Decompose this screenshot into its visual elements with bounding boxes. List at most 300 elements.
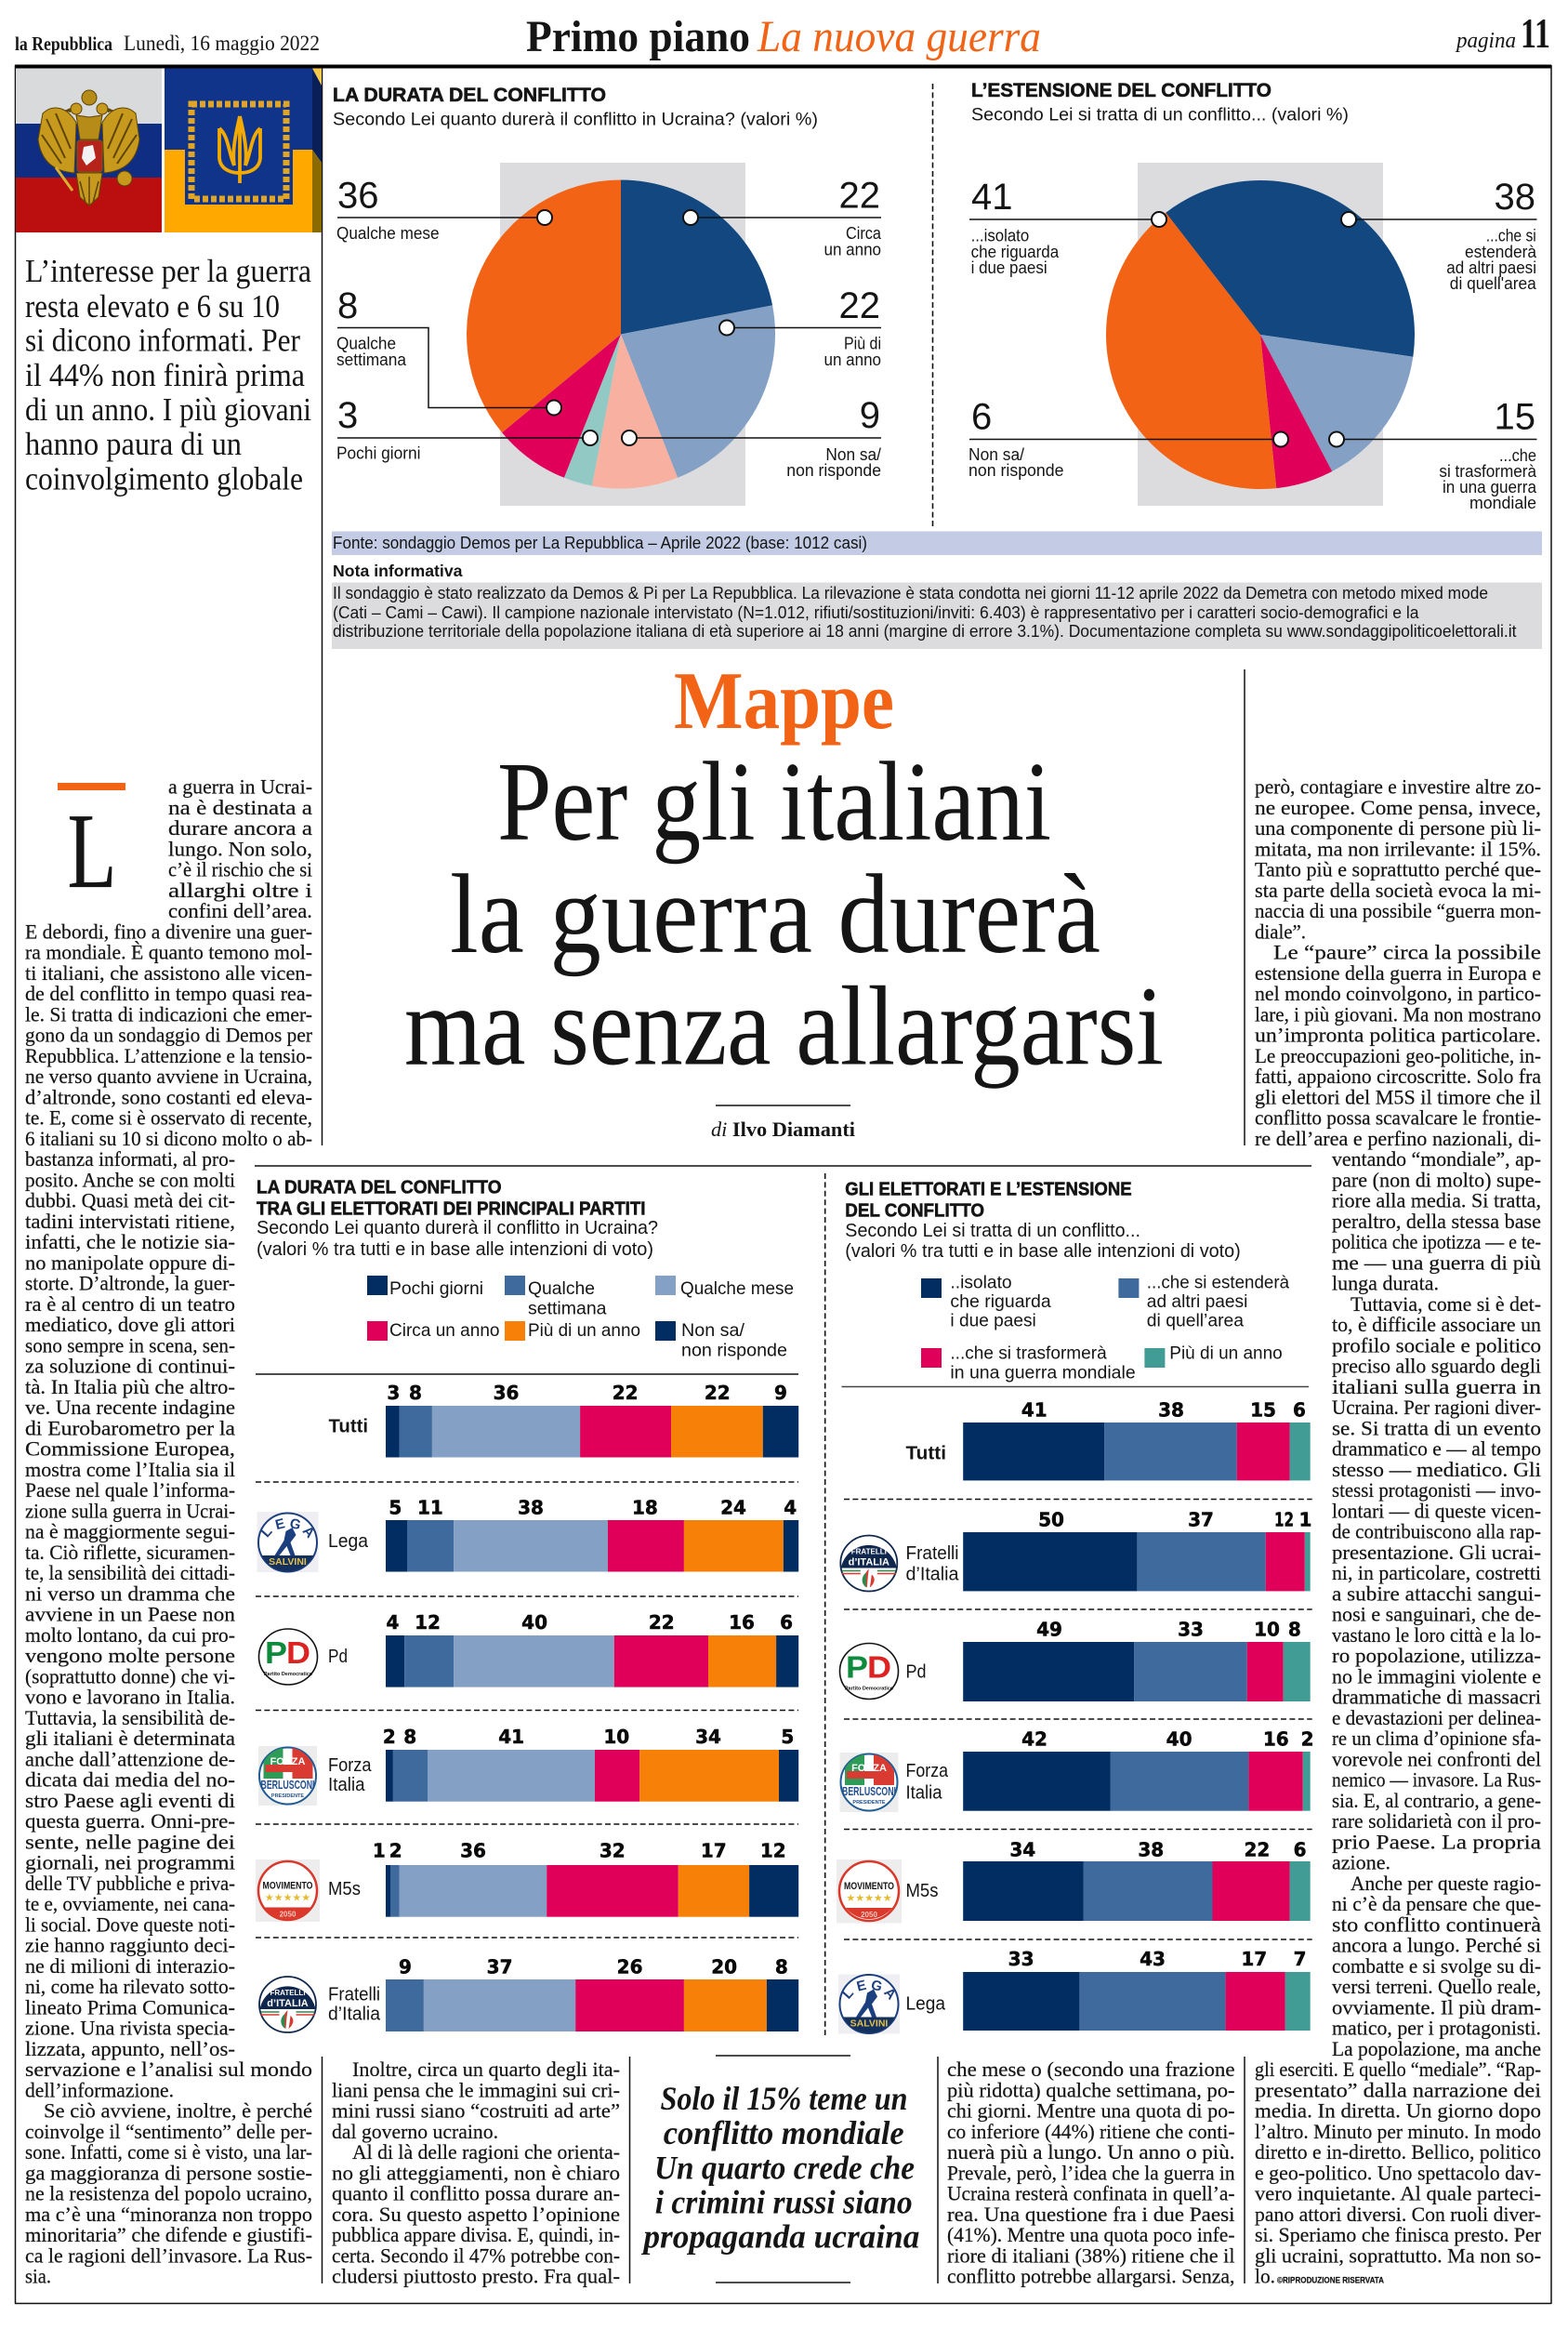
- legend: Più di un anno: [1169, 1343, 1283, 1363]
- article: right column: gli eserciti. E quello “mediale”. “Rap-: [1255, 2058, 1541, 2081]
- pull quote: Solo il 15% teme un: [660, 2080, 907, 2117]
- row: Fratelli d'Italia: 26: [617, 1956, 643, 1978]
- logo: Forza Italia: [840, 1753, 898, 1812]
- callout: circa un anno 22: 22: [838, 175, 880, 216]
- body text: sone. Infatti, come si è visto, una lar-: [25, 2140, 312, 2164]
- chart subheading: Secondo Lei si tratta di un conflitto... (valori %): [971, 104, 1349, 125]
- callout: circa un anno 22: Circa: [846, 224, 882, 243]
- logo: Pd: [258, 1629, 318, 1685]
- body text: ni verso un dramma che: [25, 1581, 235, 1605]
- row: Forza Italia: [840, 1727, 1314, 1812]
- article: right column: se. Si tratta di un evento: [1332, 1416, 1541, 1439]
- newspaper name: la Repubblica: [15, 33, 112, 55]
- body text: na è maggiormente segui-: [25, 1519, 235, 1543]
- article: right column: Anche per queste ragio-: [1351, 1872, 1541, 1895]
- row: M5s: [256, 1839, 798, 1922]
- body text: minoritaria” che difende e giustifi-: [25, 2223, 312, 2246]
- logo: Lega: [838, 1975, 900, 2034]
- article: right column: no le immagini violente e: [1332, 1664, 1541, 1687]
- body text: ne verso quanto avviene in Ucraina,: [25, 1065, 312, 1088]
- article: right column: Tuttavia, come si è det-: [1351, 1292, 1541, 1316]
- callout: qualche settimana 8: Qualche: [336, 335, 396, 353]
- logo: Pd: D: [286, 1635, 310, 1670]
- body text: za soluzione di continui-: [25, 1354, 235, 1378]
- row: Fratelli d'Italia: 12: [1274, 1508, 1294, 1530]
- body text: sente, nelle pagine dei: [25, 1830, 235, 1853]
- row: Tutti: [329, 1382, 798, 1458]
- article: right column: re un clima d’opinione sfa-: [1332, 1727, 1541, 1750]
- callout: piu di un anno 22: [824, 285, 881, 369]
- article: right column: e geo-politico. Uno spettacolo dav-: [1255, 2161, 1541, 2184]
- row: Lega: 33: [1008, 1948, 1034, 1970]
- callout: circa un anno 22: un anno: [824, 240, 881, 258]
- deck text: hanno paura di un: [25, 426, 242, 462]
- panel: pie chart, durata del conflitto: [333, 84, 882, 506]
- page label: pagina: [1455, 29, 1516, 53]
- row: Forza Italia: 40: [1166, 1727, 1192, 1750]
- main headline: ma senza allargarsi: [404, 963, 1164, 1090]
- date: Lunedì, 16 maggio 2022: [124, 32, 320, 55]
- callout: si estendera 38: [1446, 177, 1537, 293]
- main headline: Per gli italiani: [497, 739, 1051, 865]
- row: Lega: Lega: [328, 1531, 369, 1552]
- article: left column: [25, 775, 313, 2287]
- article: right column: ni, in particolare, costretti: [1332, 1561, 1541, 1584]
- body text: di Eurobarometro per la: [25, 1416, 235, 1439]
- callout: circa un anno 22: [824, 175, 882, 258]
- callout: guerra mondiale 15: mondiale: [1469, 494, 1536, 512]
- article: right column: gli elettori del M5S il timore che il: [1255, 1085, 1541, 1108]
- article: right column: azione.: [1332, 1850, 1390, 1874]
- article: lower column A: [332, 2058, 620, 2287]
- callout: guerra mondiale 15: ...che: [1499, 446, 1536, 465]
- chart heading: GLI ELETTORATI E L’ESTENSIONE: [845, 1179, 1132, 1199]
- body text: E debordi, fino a divenire una guer-: [25, 920, 312, 943]
- body text: bastanza informati, al pro-: [25, 1147, 235, 1171]
- row: Forza Italia: 34: [695, 1726, 721, 1748]
- row: Forza Italia: 5: [781, 1726, 794, 1748]
- article: right column: però, contagiare e investire altre zo-: [1255, 775, 1541, 798]
- logo: Forza Italia: BERLUSCONI: [260, 1778, 314, 1792]
- row: Forza Italia: 41: [498, 1726, 524, 1748]
- row: Fratelli d'Italia: Fratelli: [905, 1543, 959, 1564]
- body text: no manipolate oppure di-: [25, 1251, 235, 1274]
- callout: qualche settimana 8: [336, 285, 407, 369]
- row: M5s: 36: [460, 1839, 486, 1861]
- callout: si estendera 38: ad altri paesi: [1446, 258, 1536, 277]
- chart heading: TRA GLI ELETTORATI DEI PRINCIPALI PARTITI: [257, 1198, 645, 1220]
- callout: isolato 41: ...isolato: [971, 226, 1029, 245]
- row: Forza Italia: Italia: [328, 1775, 365, 1795]
- logo: M5s: MOVIMENTO: [844, 1881, 894, 1892]
- callout: guerra mondiale 15: si trasformerà: [1439, 462, 1537, 481]
- logo: Lega: [257, 1512, 318, 1572]
- body text: le. Si tratta di indicazioni che emer-: [25, 1002, 312, 1026]
- logo: Fratelli d'Italia: FRATELLI: [851, 1547, 887, 1556]
- row: Pd: Pd: [905, 1662, 926, 1683]
- body text: te. E, come si è osservato di recente,: [25, 1106, 312, 1129]
- logo: M5s: ★★★★★: [265, 1893, 310, 1904]
- row: Fratelli d'Italia: [259, 1956, 798, 2032]
- article: lower column C: co inferiore (44%) ritiene che conti-: [947, 2120, 1234, 2143]
- article: right column: una componente di persone più li-: [1255, 816, 1541, 840]
- article: right column: ni c’è da pensare che que-: [1332, 1892, 1541, 1915]
- legend: Più di un anno: [528, 1320, 640, 1341]
- row: Pd: [840, 1618, 1311, 1701]
- body text: stro Paese agli eventi di: [25, 1789, 235, 1812]
- article: right column: e devastazioni per delinea-: [1332, 1706, 1541, 1729]
- chart subheading: Secondo Lei si tratta di un conflitto...: [845, 1221, 1140, 1241]
- body text: giornali, nei programmi: [25, 1850, 235, 1874]
- body text: a guerra in Ucrai-: [168, 775, 312, 798]
- logo: Pd: [840, 1644, 898, 1700]
- body text: li social. Dove queste noti-: [25, 1912, 235, 1936]
- article: lower column C: conflitto potrebbe allargarsi. Senza,: [947, 2265, 1234, 2287]
- row: Lega: 4: [784, 1497, 797, 1519]
- row: Forza Italia: 2: [383, 1726, 396, 1748]
- row: M5s: 32: [600, 1839, 626, 1861]
- body text: durare ancora a: [168, 816, 312, 840]
- legend: ...che si trasformerà: [950, 1343, 1107, 1363]
- row: M5s: 6: [1294, 1839, 1307, 1861]
- row: Forza Italia: 8: [403, 1726, 416, 1748]
- article: right column: naccia di una possibile “guerra mon-: [1255, 899, 1541, 922]
- article: right column: La popolazione, ma anche: [1332, 2037, 1541, 2060]
- row: Tutti: 15: [1250, 1398, 1276, 1421]
- article: right column: rare solidarietà con il pro-: [1332, 1809, 1541, 1833]
- article: lower column C: [947, 2058, 1234, 2287]
- logo: Lega: A: [880, 1985, 899, 2003]
- row: M5s: 1: [373, 1839, 386, 1861]
- article: right column: Ucraina. Per ragioni diver-: [1332, 1396, 1541, 1419]
- article: right column: l’altro. Minuto per minuto. In modo: [1255, 2120, 1541, 2143]
- article: lower column A: dal governo ucraino.: [332, 2120, 498, 2143]
- logo: Lega: E: [855, 1978, 868, 1995]
- chart heading: [845, 1179, 1132, 1222]
- article: right column: Le preoccupazioni geo-politiche, in-: [1255, 1044, 1541, 1067]
- article: right column: drammatiche di massacri: [1332, 1685, 1541, 1709]
- row: Tutti: [905, 1398, 1311, 1480]
- pull quote: i crimini russi siano: [655, 2184, 913, 2221]
- article: right column: sia. E, al contrario, a gene-: [1332, 1789, 1541, 1812]
- legend: [921, 1272, 1289, 1383]
- row: M5s: 12: [760, 1839, 786, 1861]
- callout: piu di un anno 22: un anno: [824, 351, 881, 369]
- logo: Lega: L: [258, 1524, 276, 1541]
- article: right column: versi terreni. Quello reale,: [1332, 1975, 1541, 1998]
- methodological note: Nota informativa: [333, 562, 463, 580]
- deck text: si dicono informati. Per: [25, 322, 300, 359]
- row: Lega: Lega: [905, 1993, 946, 2014]
- row: M5s: 34: [1009, 1839, 1035, 1861]
- article: right column: presentato” dalla narrazione dei: [1255, 2078, 1541, 2101]
- callout: non sa 6: Non sa/: [968, 445, 1024, 464]
- row: Pd: 12: [415, 1611, 441, 1634]
- article: right column: un’impronta politica particolare.: [1255, 1023, 1541, 1047]
- body text: sia.: [25, 2265, 51, 2287]
- source bar: [332, 532, 1542, 555]
- callout: guerra mondiale 15: in una guerra: [1443, 478, 1537, 496]
- article: lower column A: Al di là delle ragioni che orienta-: [352, 2140, 620, 2164]
- drop cap accent bar: [58, 783, 125, 790]
- logo: Pd: D: [867, 1649, 891, 1685]
- row: Forza Italia: Italia: [905, 1782, 942, 1803]
- article: right column: me — una guerra di più: [1332, 1251, 1541, 1274]
- article: right column: mitata, ma non irrilevante: il 15%.: [1255, 837, 1541, 860]
- row: Pd: 6: [780, 1611, 793, 1634]
- page header: [15, 10, 1550, 61]
- row: M5s: M5s: [328, 1879, 361, 1899]
- panel: bar chart, durata per partito: [256, 1177, 798, 2032]
- body text: lineato Prima Comunica-: [25, 1995, 235, 2018]
- row: Tutti: 41: [1021, 1398, 1048, 1421]
- article: right column: vorevole nei confronti del: [1332, 1747, 1541, 1770]
- body text: te, la sensibilità dei cittadi-: [25, 1561, 235, 1584]
- callout: qualche mese 36: 36: [337, 175, 379, 216]
- body text: ni, come ha rilevato sotto-: [25, 1975, 235, 1998]
- chart heading: DEL CONFLITTO: [845, 1199, 984, 1222]
- article: lower column A: cludersi piuttosto presto. Fra qual-: [332, 2265, 620, 2287]
- row: M5s: 2: [389, 1839, 402, 1861]
- logo: Fratelli d'Italia: d’ITALIA: [267, 1998, 309, 2009]
- pull quote: propaganda ucraina: [640, 2218, 919, 2256]
- row: Fratelli d'Italia: d’Italia: [328, 2005, 381, 2025]
- body text: infatti, che le notizie sia-: [25, 1230, 235, 1253]
- row: Lega: 7: [1294, 1948, 1307, 1970]
- body text: dell’informazione.: [25, 2078, 174, 2101]
- logo: M5s: 2050: [861, 1911, 877, 1919]
- body text: te e, ovviamente, nei cana-: [25, 1892, 235, 1915]
- row: Pd: 49: [1036, 1618, 1062, 1640]
- source bar: Fonte: sondaggio Demos per La Repubblica – Aprile 2022 (base: 1012 casi): [333, 534, 867, 552]
- body text: storte. D’altronde, la guer-: [25, 1272, 235, 1294]
- row: Pd: 4: [386, 1611, 399, 1634]
- logo: Pd: Partito Democratico: [264, 1672, 313, 1677]
- article: right column: riore alla media. Si tratta,: [1332, 1188, 1541, 1212]
- row: M5s: 38: [1138, 1839, 1164, 1861]
- body text: Se ciò avviene, inoltre, è perché: [44, 2099, 312, 2122]
- logo: Forza Italia: BERLUSCONI: [842, 1784, 896, 1798]
- article: right column: lare, i più giovani. Ma non mostrano: [1255, 1002, 1541, 1026]
- body text: ra mondiale. È quanto temono mol-: [25, 941, 312, 963]
- logo: Fratelli d'Italia: [840, 1536, 897, 1592]
- logo: Pd: Partito Democratico: [845, 1687, 894, 1692]
- callout: guerra mondiale 15: [1439, 396, 1537, 512]
- row: M5s: 17: [701, 1839, 727, 1861]
- callout: non sa 9: [786, 395, 881, 480]
- body text: ca le ragioni dell’invasore. La Rus-: [25, 2243, 312, 2267]
- callout: si estendera 38: ...che si: [1486, 226, 1536, 245]
- article: lower column C: rea. Una questione fra i due Paesi: [947, 2203, 1234, 2226]
- callout: pochi giorni 3: Pochi giorni: [336, 444, 420, 463]
- body text: Paese nel quale l’informa-: [25, 1478, 235, 1502]
- callout: non sa 6: [968, 396, 1063, 480]
- body text: tadini intervistati ritiene,: [25, 1210, 235, 1233]
- article: right column: sto conflitto continuerà: [1332, 1912, 1541, 1936]
- logo: Forza Italia: PRESIDENTE: [271, 1793, 304, 1799]
- body text: ve. Una recente indagine: [25, 1396, 235, 1419]
- legend: non risponde: [681, 1341, 787, 1361]
- body text: vengono molte persone: [25, 1644, 235, 1667]
- callout: qualche mese 36: Qualche mese: [336, 224, 439, 243]
- article: right column: ro popolazione, utilizza-: [1332, 1644, 1541, 1667]
- callout: qualche settimana 8: 8: [337, 285, 358, 326]
- row: Fratelli d'Italia: 20: [711, 1956, 737, 1978]
- body text: avviene in un Paese non: [25, 1603, 235, 1625]
- article: lower column C: chi giorni. Mentre una quota di po-: [947, 2099, 1234, 2122]
- legend: Non sa/: [681, 1320, 745, 1341]
- article: right column: matico, per i protagonisti.: [1332, 2016, 1541, 2040]
- row: Tutti: 9: [774, 1382, 787, 1404]
- article: right column: ventando “mondiale”, ap-: [1332, 1147, 1541, 1171]
- body text: ne di milioni di interazio-: [25, 1954, 235, 1978]
- row: Tutti: 6: [1293, 1398, 1306, 1421]
- article: right column: nosi e sanguinari, che de-: [1332, 1603, 1541, 1625]
- byline: di Ilvo Diamanti: [711, 1118, 855, 1141]
- article: right column: politica che ipotizza — e te-: [1332, 1230, 1541, 1253]
- body text: gono da un sondaggio di Demos per: [25, 1023, 313, 1047]
- pull quote: conflitto mondiale: [664, 2114, 904, 2151]
- body text: d’altronde, sono costanti ed eleva-: [25, 1085, 312, 1108]
- row: Lega: 5: [389, 1497, 402, 1519]
- row: Tutti: 22: [613, 1382, 639, 1404]
- article: right column: diretto e in-diretto. Bellico, politico: [1255, 2140, 1541, 2164]
- article: lower column A: mini russi siano “costruiti ad arte”: [332, 2099, 620, 2122]
- deck text: L’interesse per la guerra: [25, 253, 311, 289]
- chart subheading: (valori % tra tutti e in base alle intenzioni di voto): [845, 1241, 1241, 1262]
- chart heading: [257, 1177, 645, 1220]
- body text: 6 italiani su 10 si dicono molto o ab-: [25, 1127, 312, 1150]
- body text: mediatico, dove gli attori: [25, 1313, 235, 1336]
- legend: Qualche: [528, 1278, 595, 1299]
- body text: ra è al centro di un teatro: [25, 1292, 235, 1316]
- article: right column: preciso allo sguardo degli: [1332, 1354, 1541, 1378]
- chart heading: LA DURATA DEL CONFLITTO: [333, 84, 606, 106]
- article: right column: de contribuiscono alla rap-: [1332, 1519, 1541, 1543]
- article: right column: gli ucraini, soprattutto. Ma non so-: [1255, 2243, 1541, 2267]
- article: right column: stesso — mediatico. Gli: [1332, 1458, 1541, 1481]
- deck text: coinvolgimento globale: [25, 461, 303, 496]
- row: Pd: 22: [649, 1611, 675, 1634]
- callout: isolato 41: 41: [971, 177, 1013, 218]
- logo: M5s: MOVIMENTO: [262, 1880, 313, 1891]
- body text: ta. Ciò riflette, sicuramen-: [25, 1541, 235, 1564]
- row: Pd: 16: [729, 1611, 755, 1634]
- logo: M5s: [837, 1859, 902, 1923]
- article: lower column A: pubblica appare divisa. E, quindi, in-: [332, 2223, 620, 2246]
- kicker: Mappe: [674, 656, 894, 747]
- row: Tutti: 3: [387, 1382, 400, 1404]
- callout: isolato 41: i due paesi: [971, 258, 1048, 277]
- row: Fratelli d'Italia: [840, 1508, 1311, 1592]
- callout: si estendera 38: estenderà: [1465, 243, 1537, 261]
- callout: piu di un anno 22: Più di: [844, 335, 881, 353]
- body text: (soprattutto donne) che vi-: [25, 1664, 235, 1687]
- row: Lega: 17: [1241, 1948, 1267, 1970]
- row: Pd: 40: [521, 1611, 547, 1634]
- logo: Lega: A: [299, 1523, 318, 1542]
- copyright line: ©RIPRODUZIONE RISERVATA: [1277, 2276, 1384, 2285]
- body text: anche dall’attenzione de-: [25, 1747, 235, 1770]
- chart subheading: [257, 1218, 658, 1260]
- legend: i due paesi: [950, 1311, 1036, 1331]
- row: Lega: 24: [720, 1497, 746, 1519]
- chart heading: LA DURATA DEL CONFLITTO: [257, 1177, 502, 1198]
- logo: M5s: ★★★★★: [846, 1893, 892, 1904]
- chart subheading: [845, 1221, 1241, 1262]
- callout: pochi giorni 3: [336, 395, 420, 463]
- article: right column: sta parte della società evoca la mi-: [1255, 879, 1541, 902]
- pull quote: Un quarto crede che: [654, 2149, 915, 2186]
- legend: Qualche mese: [680, 1278, 794, 1299]
- row: M5s: 22: [1244, 1839, 1270, 1861]
- body text: ti italiani, che assistono alle vicen-: [25, 961, 312, 985]
- section title: Primo piano: [526, 12, 750, 61]
- article: right column: pare (non di molto) supe-: [1332, 1168, 1541, 1191]
- article: right column: re dell’area e perfino nazionali, di-: [1255, 1127, 1541, 1150]
- legend: Circa un anno: [389, 1320, 500, 1341]
- row: Lega: 38: [518, 1497, 544, 1519]
- logo: Fratelli d'Italia: d’ITALIA: [849, 1556, 889, 1568]
- article: right column: si. Speriamo che finisca presto. Per: [1255, 2223, 1542, 2246]
- methodological note: distribuzione territoriale della popolazione italiana di età superiore ai 18 anni (margine di errore 3.1%). Documentazione completa su www.sondaggipoliticoelettorali.it: [333, 622, 1517, 641]
- article: right column: ne europee. Come pensa, invece,: [1255, 796, 1541, 819]
- article: lower column A: liani pensa che le immagini sui cri-: [332, 2078, 620, 2101]
- panel: pie chart, estensione del conflitto: [968, 79, 1537, 512]
- article: right column: to, è difficile associare un: [1332, 1313, 1541, 1336]
- body text: [25, 775, 313, 2287]
- article: right column: lunga durata.: [1332, 1272, 1439, 1294]
- chart heading: L’ESTENSIONE DEL CONFLITTO: [971, 79, 1272, 101]
- row: Fratelli d'Italia: 8: [775, 1956, 788, 1978]
- article: right column: fatti, appaiono circoscritte. Solo fra: [1255, 1065, 1541, 1088]
- article: right column: nemico — invasore. La Rus-: [1332, 1768, 1541, 1791]
- body text: de del conflitto in tempo quasi rea-: [25, 982, 312, 1005]
- callout: isolato 41: [971, 177, 1060, 277]
- article: right column: a subire attacchi sangui-: [1332, 1581, 1541, 1605]
- article: right column: presentazione. Gli ucrai-: [1332, 1541, 1541, 1564]
- row: Tutti: 38: [1158, 1398, 1184, 1421]
- logo: Lega: E: [273, 1515, 286, 1533]
- logo: Lega: SALVINI: [850, 2018, 888, 2029]
- article: right column: ovviamente. Il più dram-: [1332, 1995, 1541, 2018]
- body text: dicata dai media del no-: [25, 1768, 235, 1791]
- callout: qualche mese 36: [336, 175, 439, 243]
- drop cap: L: [67, 792, 117, 911]
- deck text: resta elevato e 6 su 10: [25, 288, 280, 324]
- chart subheading: (valori % tra tutti e in base alle intenzioni di voto): [257, 1239, 653, 1260]
- logo: Pd: P: [265, 1635, 287, 1670]
- row: Tutti: Tutti: [905, 1443, 946, 1463]
- legend: ..isolato: [950, 1272, 1012, 1292]
- row: Pd: 8: [1288, 1618, 1301, 1640]
- chart subheading: Secondo Lei quanto durerà il conflitto in Ucraina?: [257, 1218, 658, 1238]
- body text: Commissione Europea,: [25, 1437, 235, 1460]
- body text: dubbi. Quasi metà dei cit-: [25, 1188, 235, 1212]
- row: Fratelli d'Italia: 37: [487, 1956, 513, 1978]
- row: Forza Italia: 16: [1263, 1727, 1289, 1750]
- row: Pd: 10: [1254, 1618, 1280, 1640]
- row: M5s: M5s: [905, 1881, 939, 1901]
- chart subheading: Secondo Lei quanto durerà il conflitto in Ucraina? (valori %): [333, 110, 818, 130]
- image: Ukrainian flag with trident: [165, 69, 322, 232]
- article: right column: vero inquietante. Al quale parteci-: [1255, 2181, 1541, 2205]
- article: lower column A: quanto il conflitto possa durare an-: [332, 2181, 620, 2205]
- body text: posito. Anche se con molti: [25, 1168, 235, 1191]
- body text: Repubblica. L’attenzione e la tensio-: [25, 1044, 312, 1067]
- row: Fratelli d'Italia: 1: [1299, 1508, 1311, 1530]
- body text: ga maggioranza di persone sostie-: [25, 2161, 312, 2184]
